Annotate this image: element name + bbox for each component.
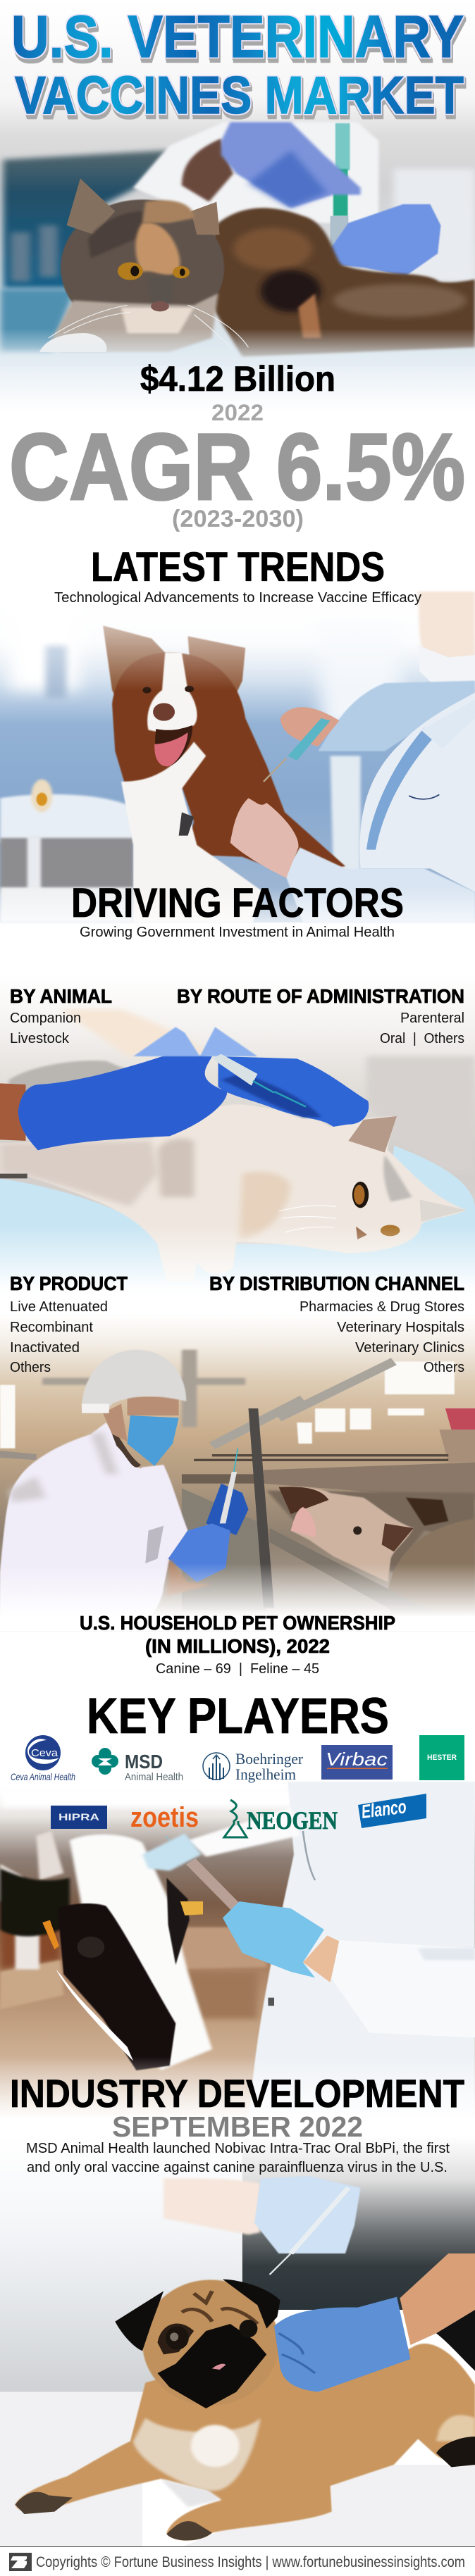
text: development description: MSD Animal Health launched Nobivac Intra-Trac Oral BbPi, the first xyxy=(26,2140,450,2156)
panel: cow photo with veterinarian xyxy=(0,1782,475,2139)
CAGR period: (2023-2030) xyxy=(172,506,304,532)
category: by product: Others xyxy=(10,1359,51,1375)
pet ownership numbers: Canine – 69 | Feline – 45 xyxy=(156,1661,319,1677)
logo: Neogen xyxy=(224,1800,338,1837)
logo: Ceva Animal Health xyxy=(11,1735,75,1782)
category: by animal: Companion xyxy=(10,1010,81,1026)
text: development date: SEPTEMBER 2022 xyxy=(112,2111,363,2143)
category: by distribution channel: Pharmacies & Drug Stores xyxy=(300,1299,464,1315)
panel: pig farm photo with veterinarian xyxy=(0,1315,475,1632)
logo: Boehringer Ingelheim xyxy=(203,1750,304,1783)
logo: Boehringer Ingelheim: Ingelheim xyxy=(235,1765,296,1783)
panel: pug photo being vaccinated xyxy=(0,2136,475,2547)
category: by distribution channel xyxy=(209,1273,464,1375)
category: by product: Inactivated xyxy=(10,1339,80,1356)
category: by route of administration: Parenteral xyxy=(400,1010,464,1026)
logo: Ceva Animal Health: Ceva Animal Health xyxy=(11,1771,75,1782)
heading: U.S. household pet ownership: (IN MILLIONS), 2022 xyxy=(145,1635,330,1657)
heading: U.S. household pet ownership xyxy=(80,1612,395,1657)
logo: MSD Animal Health xyxy=(92,1748,183,1783)
panel: dog photo being vaccinated xyxy=(0,592,475,923)
market value year: 2022 xyxy=(211,400,264,425)
logo: MSD Animal Health: MSD xyxy=(125,1751,163,1772)
footer xyxy=(0,2546,475,2576)
logo: MSD Animal Health: Animal Health xyxy=(125,1771,183,1783)
logo: Hester: HESTER xyxy=(427,1753,457,1762)
category: by distribution channel: Veterinary Hospitals xyxy=(337,1319,464,1335)
category: by animal xyxy=(10,985,112,1046)
category: by distribution channel: Others xyxy=(424,1359,464,1375)
category: by animal: Livestock xyxy=(10,1030,70,1046)
logo: Zoetis: zoetis xyxy=(130,1802,199,1833)
logo: Neogen: NEOGEN xyxy=(247,1806,338,1834)
heading: latest trends: LATEST TRENDS xyxy=(91,544,385,590)
logo: Boehringer Ingelheim: Boehringer xyxy=(235,1750,304,1768)
logo: Elanco: Elanco xyxy=(360,1796,407,1822)
icon: Fortune Business Insights logo xyxy=(9,2553,32,2571)
panel: cat photo being vaccinated xyxy=(0,0,475,412)
category: by animal: BY ANIMAL xyxy=(10,985,112,1007)
logo: Hipra xyxy=(51,1806,107,1829)
logo: Hester xyxy=(419,1735,464,1780)
category: by product xyxy=(10,1273,128,1375)
category: by product: BY PRODUCT xyxy=(10,1273,128,1294)
category: by route of administration xyxy=(177,985,464,1046)
logo: Virbac: Virbac xyxy=(326,1749,388,1770)
logo: Hipra: HIPRA xyxy=(58,1811,99,1822)
panel: white cat photo being vaccinated xyxy=(0,975,475,1315)
heading: key players: KEY PLAYERS xyxy=(87,1689,389,1744)
text: development description: and only oral vaccine against canine parainfluenza virus in the U.S. xyxy=(27,2159,448,2175)
logo: Virbac xyxy=(321,1745,393,1780)
text: latest trends statement: Technological Advancements to Increase Vaccine Efficacy xyxy=(54,589,422,606)
text: development description xyxy=(26,2140,450,2175)
category: by product: Recombinant xyxy=(10,1319,93,1335)
category: by product: Live Attenuated xyxy=(10,1299,108,1315)
category: by route of administration: Oral | Others xyxy=(380,1030,464,1046)
title xyxy=(11,4,464,125)
heading: driving factors: DRIVING FACTORS xyxy=(71,880,404,926)
market value: $4.12 Billion xyxy=(140,359,335,399)
heading: U.S. household pet ownership: U.S. HOUSEHOLD PET OWNERSHIP xyxy=(80,1612,395,1634)
logo: Ceva Animal Health: Ceva xyxy=(31,1747,58,1759)
category: by distribution channel: Veterinary Clinics xyxy=(355,1339,464,1356)
text: driving factor statement: Growing Government Investment in Animal Health xyxy=(80,924,395,940)
